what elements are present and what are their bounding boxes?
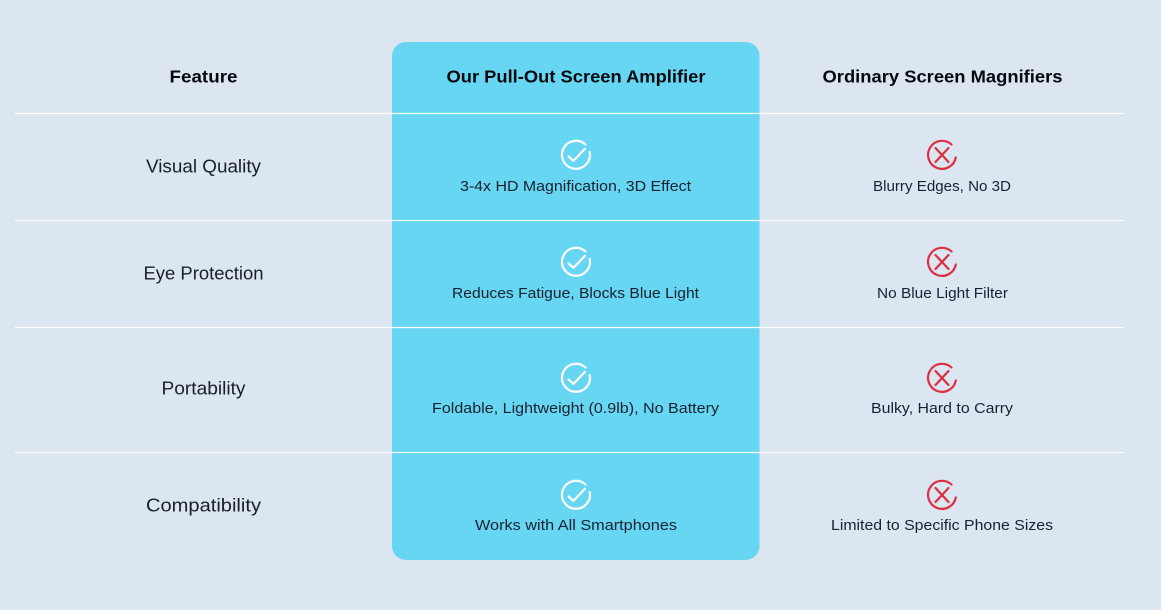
ordinary text: No Blue Light Filter	[877, 286, 1008, 302]
icon: cross	[928, 141, 956, 169]
ordinary text: Bulky, Hard to Carry	[871, 401, 1014, 417]
panel: highlighted amplifier column	[392, 42, 760, 560]
amplifier text: Foldable, Lightweight (0.9lb), No Battery	[432, 401, 720, 417]
row: compatibility	[146, 481, 1053, 534]
feature label: Visual Quality	[146, 156, 261, 176]
amplifier text: 3-4x HD Magnification, 3D Effect	[460, 179, 691, 195]
row: portability	[162, 364, 1014, 417]
amplifier text: Reduces Fatigue, Blocks Blue Light	[452, 286, 699, 302]
icon: check	[562, 248, 590, 276]
feature label: Eye Protection	[144, 264, 264, 284]
feature label: Portability	[162, 378, 246, 398]
ordinary text: Limited to Specific Phone Sizes	[831, 518, 1053, 534]
row: visual quality	[146, 141, 1011, 195]
icon: cross	[928, 481, 956, 509]
feature label: Compatibility	[146, 496, 261, 516]
heading: amplifier column: Our Pull-Out Screen Amplifier	[446, 66, 706, 86]
ordinary text: Blurry Edges, No 3D	[873, 179, 1011, 195]
icon: check	[562, 364, 590, 392]
icon: cross	[928, 364, 956, 392]
icon: check	[562, 141, 590, 169]
heading: ordinary magnifiers column: Ordinary Screen Magnifiers	[822, 66, 1063, 86]
icon: check	[562, 481, 590, 509]
row: eye protection	[144, 248, 1008, 302]
heading: feature column: Feature	[170, 66, 238, 86]
icon: cross	[928, 248, 956, 276]
amplifier text: Works with All Smartphones	[475, 518, 677, 534]
